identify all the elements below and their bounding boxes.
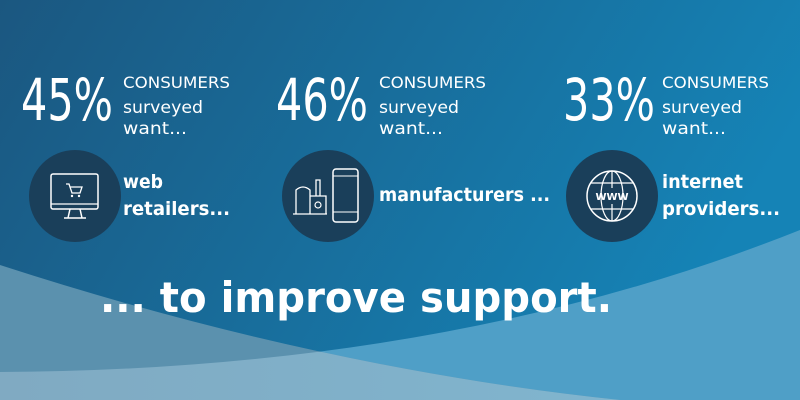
label: internet providers: internet [662, 171, 743, 193]
icon: globe www [566, 150, 658, 242]
label: internet providers [662, 171, 780, 220]
stat 2: 46% [276, 66, 368, 134]
stat 2: want... [379, 119, 443, 139]
stat 1 [21, 66, 230, 139]
wave: overlap [0, 352, 620, 400]
stat 1: CONSUMERS [123, 73, 230, 92]
stat 3: want... [662, 119, 726, 139]
stat 2: CONSUMERS [379, 73, 486, 92]
wave: right band [0, 230, 800, 400]
label: internet providers: providers... [662, 198, 780, 220]
stat 3: 33% [563, 66, 655, 134]
label: web retailers: retailers... [123, 198, 230, 220]
stat 3: surveyed [662, 98, 742, 118]
stat 1: want... [123, 119, 187, 139]
icon: factory and phone [282, 150, 374, 242]
stat 3: CONSUMERS [662, 73, 769, 92]
label: manufacturers: manufacturers ... [379, 184, 550, 206]
stat 1: 45% [21, 66, 113, 134]
stat 2 [276, 66, 486, 139]
label: web retailers [123, 171, 230, 220]
wave: left band [0, 265, 640, 400]
stat 3 [563, 66, 769, 139]
label: web retailers: web [123, 171, 163, 193]
icon: monitor with cart [29, 150, 121, 242]
icon: globe www: WWW [595, 192, 629, 203]
stat 1: surveyed [123, 98, 203, 118]
stat 2: surveyed [379, 98, 459, 118]
tagline: ... to improve support. [100, 273, 612, 322]
